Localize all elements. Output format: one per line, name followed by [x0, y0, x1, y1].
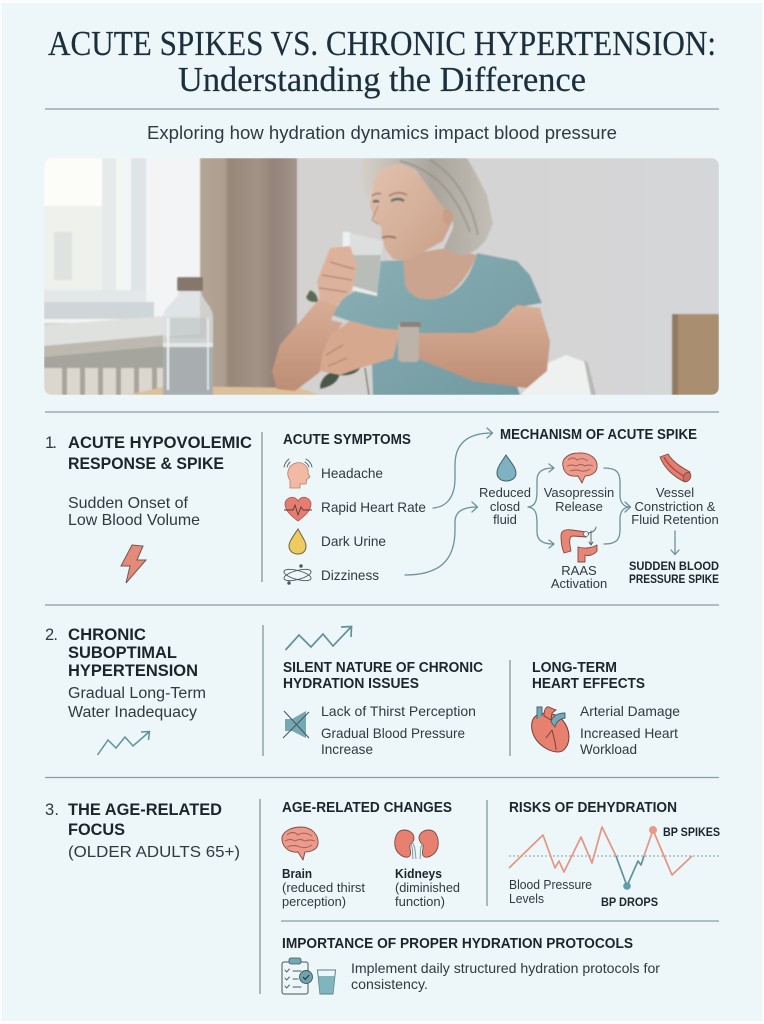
section 1 heading: RESPONSE & SPIKE	[68, 454, 224, 473]
label: RAAS activation	[551, 563, 607, 591]
long-term heart effects: LONG-TERM	[532, 660, 617, 676]
section 2 description: Gradual Long-Term	[68, 685, 206, 702]
acute symptoms list: Dizziness	[321, 567, 379, 583]
section 3 heading: (OLDER ADULTS 65+)	[68, 844, 240, 861]
label: vasopressin release	[544, 485, 614, 514]
section 2 description: Water Inadequacy	[68, 704, 197, 721]
brain text: (reduced thirst	[282, 880, 365, 895]
shirt	[332, 253, 542, 395]
marker: spike	[649, 826, 657, 834]
icon: small rising trend	[98, 732, 150, 755]
label: RAAS activation: RAAS	[561, 563, 597, 578]
arrows: merge bracket to vessel constriction	[604, 468, 630, 544]
chart line: elevated segments	[509, 827, 692, 875]
title: Understanding the Difference	[178, 60, 586, 99]
section 1: acute hypovolemic response	[45, 427, 719, 591]
section 1 description: Low Blood Volume	[68, 512, 200, 529]
protocol text: Implement daily structured hydration protocols for	[351, 960, 660, 976]
icon: brain	[282, 827, 318, 860]
mechanism of acute spike flow	[479, 427, 719, 591]
acute symptoms list: Headache	[321, 465, 383, 481]
chart line: drop segment	[616, 856, 644, 886]
marker: drop	[623, 882, 631, 890]
icon: anatomical heart	[532, 707, 569, 752]
section 2 heading: CHRONIC	[68, 626, 146, 644]
long-term heart effects: Workload	[580, 741, 637, 757]
label: reduced blood fluid	[479, 485, 531, 527]
icon: muted thirst signal	[283, 711, 309, 738]
acute symptoms list: ACUTE SYMPTOMS	[283, 432, 411, 448]
icon: large rising trend	[286, 626, 352, 650]
icon: glass of water	[318, 970, 336, 994]
neck	[403, 248, 477, 299]
icon: checklist clipboard	[282, 958, 312, 994]
risks of dehydration chart	[509, 800, 720, 909]
section 2: chronic suboptimal hypertension	[45, 625, 680, 757]
brain text	[282, 866, 365, 909]
section 2 heading: HYPERTENSION	[68, 662, 198, 680]
brain text: Brain	[282, 866, 312, 881]
section 2 heading: 2.	[45, 626, 58, 644]
risks of dehydration chart: BP SPIKES	[663, 827, 720, 839]
icon: heart with pulse	[284, 497, 312, 521]
hair	[360, 158, 493, 256]
raised hand	[317, 246, 357, 306]
glass	[350, 234, 382, 278]
kidneys text: Kidneys	[395, 866, 442, 881]
risks of dehydration chart: RISKS OF DEHYDRATION	[509, 800, 677, 816]
section 1 heading: 1.	[45, 434, 57, 452]
risks of dehydration chart: Levels	[509, 892, 544, 906]
icon: brain	[563, 453, 597, 483]
section 2 description	[68, 685, 206, 721]
long-term heart effects: HEART EFFECTS	[532, 676, 645, 692]
long-term heart effects	[532, 660, 680, 757]
brain text: perception)	[282, 894, 346, 909]
section 1 heading	[45, 433, 252, 473]
icon: RAAS organs	[561, 527, 597, 562]
section 1 description	[68, 495, 200, 529]
long-term heart effects: Increased Heart	[580, 725, 678, 741]
plant	[306, 290, 318, 302]
section 3 heading	[45, 801, 240, 861]
long-term heart effects: Arterial Damage	[580, 703, 680, 719]
watch	[398, 323, 419, 362]
section 3 heading: THE AGE-RELATED	[68, 801, 222, 819]
risks of dehydration chart: BP DROPS	[601, 897, 658, 909]
icon: dizziness orbit	[283, 565, 312, 584]
arrow: dizziness to reduced fluid	[405, 502, 478, 575]
right arm	[417, 305, 550, 388]
acute symptoms list: Rapid Heart Rate	[321, 499, 426, 515]
icon: lightning bolt	[121, 545, 146, 583]
icon: kidneys	[395, 830, 438, 859]
section 2 heading: SUBOPTIMAL	[68, 644, 177, 662]
arrows: branch bracket to vasopressin and RAAS	[528, 464, 554, 548]
acute symptoms list: Dark Urine	[321, 533, 386, 549]
arrow: symptoms to mechanism title	[433, 428, 492, 508]
section 3: the age-related focus	[45, 799, 720, 994]
left arm	[272, 298, 343, 391]
icon: blue drop	[497, 455, 516, 481]
label: sudden blood pressure spike	[629, 561, 719, 586]
protocol text	[351, 960, 660, 992]
face	[370, 161, 454, 260]
acute symptoms list	[283, 432, 426, 584]
lower hand	[320, 321, 400, 375]
icon: blood vessel	[660, 454, 693, 483]
importance of hydration protocols: IMPORTANCE OF PROPER HYDRATION PROTOCOLS	[282, 936, 633, 952]
protocol text: consistency.	[351, 976, 428, 992]
mechanism of acute spike flow: MECHANISM OF ACUTE SPIKE	[500, 427, 697, 443]
label: RAAS activation: Activation	[551, 576, 607, 591]
label: sudden blood pressure spike: PRESSURE SPIKE	[629, 574, 719, 586]
facial features	[372, 193, 407, 196]
silent nature of chronic hydration issues: Gradual Blood Pressure	[321, 725, 465, 741]
section 3 heading: FOCUS	[68, 821, 125, 839]
age-related changes: AGE-RELATED CHANGES	[282, 800, 452, 816]
icon: headache	[284, 459, 312, 488]
risks of dehydration chart: Blood Pressure	[509, 878, 592, 892]
label: reduced blood fluid: fluid	[493, 512, 517, 527]
subtitle: Exploring how hydration dynamics impact blood pressure	[147, 123, 617, 143]
icon: yellow drop	[289, 529, 306, 554]
arrow: down to blood pressure spike	[671, 531, 679, 554]
age-related changes	[282, 800, 460, 909]
kidneys text: (diminished	[395, 880, 460, 895]
silent nature of chronic hydration issues: Lack of Thirst Perception	[321, 703, 476, 719]
title	[48, 24, 716, 99]
section 3 heading: 3.	[45, 801, 59, 819]
label: vasopressin release: Vasopressin	[544, 485, 614, 500]
section 2 heading	[45, 626, 198, 680]
photo: woman drinking water and checking her watch	[44, 158, 719, 395]
label: vessel constriction and fluid retention: Vessel	[656, 485, 694, 500]
section 1 heading: ACUTE HYPOVOLEMIC	[68, 433, 252, 452]
kidneys text: function)	[395, 894, 445, 909]
importance of hydration protocols	[282, 936, 660, 994]
section 1 description: Sudden Onset of	[68, 495, 189, 512]
label: vessel constriction and fluid retention	[631, 485, 719, 527]
silent nature of chronic hydration issues: SILENT NATURE OF CHRONIC	[283, 660, 484, 676]
silent nature of chronic hydration issues: HYDRATION ISSUES	[283, 676, 419, 692]
silent nature of chronic hydration issues	[283, 660, 484, 757]
bottle	[177, 277, 203, 291]
label: reduced blood fluid: Reduced	[479, 485, 531, 500]
label: reduced blood fluid: closd	[490, 499, 520, 514]
label: vessel constriction and fluid retention: Fluid Retention	[631, 512, 719, 527]
label: vasopressin release: Release	[555, 499, 603, 514]
label: sudden blood pressure spike: SUDDEN BLOOD	[629, 561, 719, 573]
silent nature of chronic hydration issues: Increase	[321, 741, 373, 757]
label: vessel constriction and fluid retention: Constriction &	[635, 499, 716, 514]
kidneys text	[395, 866, 460, 909]
